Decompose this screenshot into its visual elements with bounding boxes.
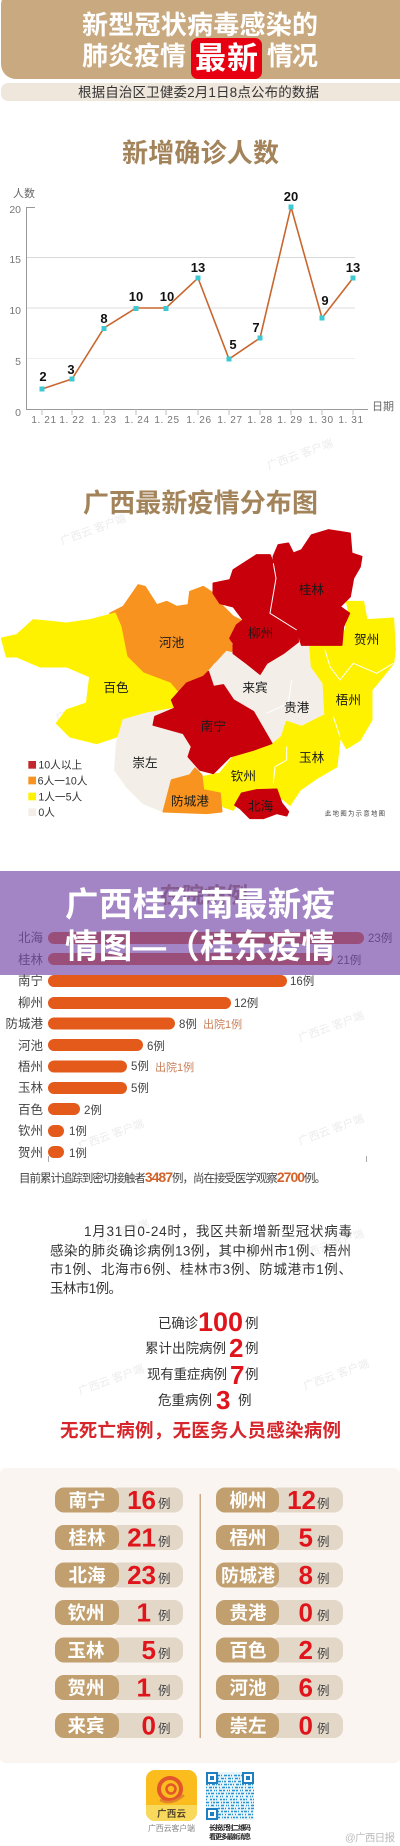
horizontal bar chart: 柳州 (18, 996, 43, 1010)
bar section title: 在院病例 (160, 883, 248, 908)
case units: 例 (317, 1497, 330, 1511)
watermarks lower: 广西云 客户端 (76, 1116, 146, 1153)
case units: 例 (158, 1497, 171, 1511)
no deaths statement: 无死亡病例，无医务人员感染病例 (60, 1420, 341, 1441)
case counts: 0 (299, 1710, 313, 1740)
line chart: 5 (15, 356, 21, 368)
horizontal bar chart: 百色 (18, 1102, 43, 1117)
horizontal bar chart: 河池 (18, 1039, 43, 1053)
line chart: 8 (100, 311, 108, 326)
map legend: 1人一5人 (38, 791, 82, 803)
red badge: 最新 (195, 41, 258, 76)
map labels: 崇左 (132, 756, 158, 770)
line chart: 13 (346, 260, 360, 275)
region: Fangchenggang (163, 768, 222, 813)
QR code (206, 1772, 254, 1820)
horizontal bar chart: 出院1例 (203, 1017, 242, 1031)
region: Beihai (235, 789, 288, 818)
map legend (28, 760, 88, 819)
horizontal bar chart: 1例 (69, 1124, 87, 1138)
QR caption: 看更多最新消息 (209, 1832, 251, 1841)
case statistics: 已确诊 (158, 1316, 198, 1331)
horizontal bar chart: 玉林 (18, 1081, 43, 1095)
region: Laibin and Guigang (208, 642, 325, 743)
city names: 柳州 (229, 1490, 267, 1511)
line chart: 1. 26 (186, 415, 212, 426)
horizontal bar chart: 南宁 (18, 973, 43, 988)
horizontal bar chart: 8例 (179, 1017, 197, 1031)
line chart: 1. 23 (91, 415, 117, 426)
horizontal bar chart: 桂林 (18, 952, 43, 967)
case counts: 23 (127, 1560, 156, 1590)
line chart: 15 (9, 254, 21, 266)
case counts: 5 (142, 1635, 156, 1665)
line chart: 5 (229, 337, 237, 352)
line chart: 10 (129, 289, 143, 304)
map title: 广西最新疫情分布图 (83, 488, 318, 518)
summary paragraph: 1月31日0-24时，我区共新增新型冠状病毒 (84, 1224, 352, 1239)
summary paragraph: 感染的肺炎确诊病例13例，其中柳州市1例、梧州 (50, 1242, 351, 1258)
case counts: 6 (299, 1672, 313, 1702)
city names: 桂林 (68, 1528, 106, 1548)
map labels: 梧州 (336, 694, 361, 708)
horizontal bar chart: 钦州 (18, 1124, 43, 1138)
case counts: 16 (127, 1485, 156, 1515)
weibo watermark: @广西日报 (345, 1831, 396, 1844)
city panel (0, 1468, 400, 1763)
case units: 例 (317, 1722, 330, 1736)
horizontal bar chart: 贺州 (18, 1146, 43, 1160)
horizontal bar chart: 防城港 (5, 1016, 43, 1031)
map labels: 贵港 (284, 701, 310, 715)
watermarks lower: 广西云 客户端 (296, 1111, 366, 1148)
close contacts note: 目前累计追踪到密切接触者3487例，尚在接受医学观察2700例。 (19, 1169, 326, 1185)
case statistics: 100 (198, 1307, 243, 1337)
line chart: 1. 27 (217, 415, 243, 426)
header banner (1, 0, 400, 79)
map labels: 南宁 (201, 719, 226, 734)
horizontal bar chart: 5例 (131, 1081, 149, 1095)
horizontal bar chart: 21例 (337, 953, 361, 967)
case counts: 1 (137, 1598, 151, 1628)
region: Liuzhou (213, 555, 298, 674)
case counts: 0 (299, 1598, 313, 1628)
watermarks lower: 广西云 客户端 (296, 1008, 366, 1045)
watermarks lower: 广西云 客户端 (81, 1216, 151, 1253)
map labels: 防城港 (171, 794, 209, 809)
city names: 崇左 (229, 1716, 267, 1736)
line chart: 1. 29 (277, 415, 303, 426)
watermarks: 广西云 客户端 (58, 511, 128, 548)
case units: 例 (158, 1572, 171, 1586)
case units: 例 (317, 1609, 330, 1623)
case statistics: 例 (245, 1316, 258, 1331)
case statistics: 2 (229, 1333, 243, 1363)
icon: app logo (146, 1770, 197, 1821)
header title line 1: 新型冠状病毒感染的 (82, 10, 318, 40)
region: Hechi (110, 585, 243, 697)
case units: 例 (158, 1647, 171, 1661)
line chart: 20 (284, 189, 298, 204)
case counts: 1 (137, 1672, 151, 1702)
city names: 南宁 (68, 1490, 106, 1511)
watermarks lower: 广西云 客户端 (296, 1226, 366, 1263)
region: Chongzuo (115, 708, 200, 812)
case counts: 12 (287, 1485, 316, 1515)
case units (158, 1497, 330, 1736)
map labels: 百色 (103, 680, 129, 695)
header title line 2 right: 情况 (267, 41, 318, 71)
case statistics: 危重病例 (158, 1393, 212, 1408)
case units: 例 (317, 1684, 330, 1698)
map labels: 玉林 (299, 751, 325, 765)
header title line 2 left: 肺炎疫情 (82, 41, 186, 71)
city names (67, 1490, 275, 1736)
city names: 北海 (68, 1565, 106, 1586)
map legend: 0人 (38, 807, 55, 819)
case statistics: 3 (216, 1385, 230, 1415)
watermarks lower: 广西云 客户端 (76, 1361, 146, 1398)
horizontal bar chart: 23例 (368, 931, 392, 945)
case units: 例 (317, 1647, 330, 1661)
case units: 例 (158, 1535, 171, 1549)
map labels (103, 583, 379, 813)
watermarks lower: 广西云 客户端 (301, 1356, 371, 1393)
line chart: 13 (191, 260, 205, 275)
purple title overlay (0, 871, 400, 975)
map labels: 桂林 (299, 583, 324, 597)
line chart: 3 (67, 362, 75, 377)
watermarks (0, 436, 391, 725)
horizontal bar chart: 梧州 (18, 1059, 43, 1074)
city names: 百色 (229, 1640, 267, 1661)
case units: 例 (158, 1722, 171, 1736)
case statistics: 现有重症病例 (147, 1367, 227, 1382)
app caption: 广西云客户端 (148, 1823, 195, 1833)
city names: 来宾 (67, 1716, 105, 1736)
line chart (9, 187, 394, 426)
line chart: 1. 31 (338, 415, 364, 426)
horizontal bar chart: 1例 (69, 1146, 87, 1160)
line chart: 1. 30 (308, 415, 334, 426)
case units: 例 (158, 1609, 171, 1623)
case counts: 8 (299, 1560, 313, 1590)
summary paragraph: 玉林市1例。 (50, 1280, 122, 1296)
horizontal bar chart: 2例 (84, 1103, 102, 1117)
case statistics: 累计出院病例 (145, 1341, 226, 1356)
line chart: 10 (9, 305, 21, 317)
case units: 例 (317, 1572, 330, 1586)
case statistics: 7 (230, 1360, 244, 1390)
line chart: 日期 (372, 400, 394, 413)
name pills (55, 1488, 279, 1738)
case statistics (145, 1307, 258, 1415)
map labels: 贺州 (354, 633, 379, 647)
city names: 贺州 (67, 1678, 105, 1698)
subheader bar (1, 83, 400, 101)
map labels: 来宾 (242, 680, 268, 695)
map labels: 北海 (248, 799, 274, 813)
line chart: 20 (9, 204, 21, 216)
line chart: 2 (39, 369, 47, 384)
horizontal bar chart: 北海 (18, 930, 43, 945)
purple title overlay: 情图—（桂东疫情 (65, 929, 335, 966)
line chart: 1. 28 (247, 415, 273, 426)
case statistics: 例 (245, 1367, 258, 1382)
map legend: 10人以上 (38, 760, 82, 772)
horizontal bar chart (5, 930, 392, 1162)
horizontal bar chart: 出院1例 (155, 1060, 194, 1074)
city names: 钦州 (67, 1602, 105, 1624)
horizontal bar chart: 5例 (131, 1059, 149, 1073)
map labels: 河池 (159, 636, 185, 650)
region: Hezhou and Wuzhou (310, 602, 395, 748)
line chart: 1. 24 (124, 415, 150, 426)
line chart: 7 (252, 320, 260, 335)
line chart: 人数 (13, 187, 35, 200)
chart title: 新增确诊人数 (122, 138, 279, 168)
summary paragraph (50, 1224, 352, 1296)
case statistics: 例 (238, 1393, 252, 1408)
region: Guilin (270, 530, 362, 645)
case counts: 21 (127, 1522, 156, 1552)
watermarks lower (76, 1008, 371, 1398)
icon: app logo: 广西云 (157, 1808, 186, 1820)
watermarks: 广西云 客户端 (265, 436, 335, 472)
line chart: 1. 21 (31, 415, 57, 426)
map legend: 6人一10人 (38, 775, 88, 787)
horizontal bar chart: 12例 (234, 996, 258, 1010)
horizontal bar chart: 16例 (290, 974, 314, 988)
region: Nanning (153, 672, 272, 773)
watermarks: 广西云 客户端 (54, 688, 123, 725)
line chart: 10 (160, 289, 174, 304)
line chart: 1. 25 (154, 415, 180, 426)
map of Guangxi (2, 530, 395, 819)
case statistics: 例 (245, 1341, 258, 1356)
case counts (127, 1485, 316, 1740)
region: Yulin and Qinzhou (203, 715, 340, 810)
case units: 例 (158, 1684, 171, 1698)
value pills (110, 1488, 343, 1738)
subheader bar: 根据自治区卫健委2月1日8点公布的数据 (78, 85, 319, 100)
city names: 河池 (229, 1678, 267, 1698)
region: Baise (2, 613, 178, 743)
city names: 贵港 (229, 1602, 267, 1624)
QR caption (209, 1823, 251, 1841)
QR caption: 长按识别二维码 (209, 1823, 251, 1832)
horizontal bar chart: 6例 (147, 1039, 165, 1053)
case units: 例 (317, 1535, 330, 1549)
city names: 玉林 (67, 1640, 105, 1661)
purple title overlay: 广西桂东南最新疫 (65, 887, 335, 924)
case counts: 2 (299, 1635, 313, 1665)
map labels: 柳州 (248, 626, 273, 640)
line chart: 1. 22 (59, 415, 85, 426)
city names: 梧州 (229, 1528, 267, 1548)
map note: 此地图为示意地图 (325, 809, 385, 818)
line chart: 9 (321, 293, 329, 308)
case counts: 5 (299, 1522, 313, 1552)
line chart: 0 (15, 407, 21, 419)
case counts: 0 (142, 1710, 156, 1740)
city names: 防城港 (221, 1565, 275, 1586)
map labels: 钦州 (231, 769, 256, 783)
summary paragraph: 市1例、北海市6例、桂林市3例、防城港市1例、 (50, 1261, 352, 1277)
